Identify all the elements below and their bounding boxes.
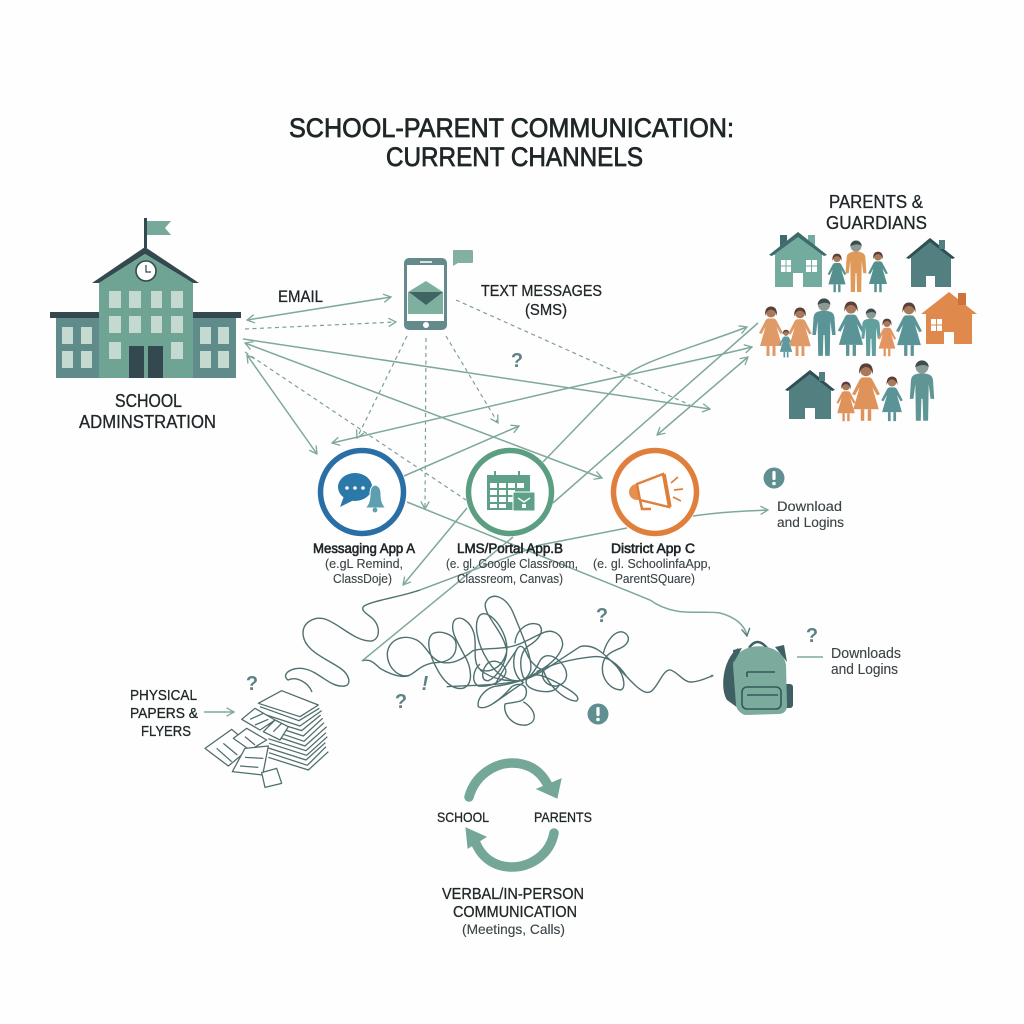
label: LMS portal app B: [446, 541, 578, 586]
label: LMS portal app B: Classreom, Canvas): [457, 572, 563, 586]
heading: parents and guardians: GUARDIANS: [826, 213, 927, 233]
icon: paper stack: [205, 691, 328, 787]
heading: parents and guardians: [826, 192, 927, 233]
app circle: LMS portal: [468, 450, 552, 534]
label: text messages: (SMS): [525, 302, 567, 319]
label: district app C: (e. gl. SchoolinfaApp,: [593, 557, 711, 571]
icon: school building: [50, 218, 241, 378]
label: downloads and logins: and Logins: [831, 662, 898, 678]
label: download and logins: [777, 499, 844, 530]
label: text messages: TEXT MESSAGES: [481, 283, 602, 300]
label: district app C: ParentSQuare): [615, 572, 695, 586]
label: messaging app A: Messaging App A: [313, 541, 415, 556]
cycle arrows: [466, 763, 561, 867]
question marks and alerts: ?: [246, 673, 258, 695]
label: download and logins: Download: [777, 499, 842, 514]
connecting arrows: [204, 297, 768, 712]
label: LMS portal app B: (e. gl. Google Classroom,: [446, 557, 578, 571]
icon: backpack: [723, 642, 793, 715]
label: messaging app A: (e.gL Remind,: [325, 557, 403, 571]
label: school and parents: [437, 809, 592, 825]
title: CURRENT CHANNELS: [386, 142, 643, 172]
icon: alert: [764, 468, 784, 488]
app circle: messaging: [320, 450, 404, 534]
label: physical papers: [130, 687, 198, 740]
label: verbal communication: COMMUNICATION: [453, 904, 577, 921]
label: school and parents: SCHOOL: [437, 809, 489, 825]
label: downloads and logins: Downloads: [831, 646, 901, 662]
heading: school administration: SCHOOL: [115, 391, 182, 411]
label: physical papers: FLYERS: [141, 723, 191, 740]
icon: families: [759, 240, 934, 421]
label: downloads and logins: [831, 646, 901, 678]
label: download and logins: and Logins: [777, 515, 844, 530]
label: verbal communication: (Meetings, Calls): [462, 921, 565, 937]
question marks and alerts: ?: [395, 691, 407, 713]
label: messaging app A: [313, 541, 415, 586]
title: [289, 113, 734, 172]
title: SCHOOL-PARENT COMMUNICATION:: [289, 113, 734, 143]
question marks and alerts: !: [422, 673, 429, 695]
question marks and alerts: [246, 605, 818, 724]
label: district app C: District App C: [611, 541, 695, 556]
icon: phone with envelope: [404, 250, 473, 330]
label: verbal communication: [442, 886, 584, 937]
label: verbal communication: VERBAL/IN-PERSON: [442, 886, 584, 903]
label: email: EMAIL: [278, 287, 323, 306]
icon: clock: [136, 261, 156, 281]
label: messaging app A: ClassDoje): [333, 572, 392, 586]
label: LMS portal app B: LMS/Portal App.B: [457, 541, 563, 556]
left squiggle to papers: [286, 590, 420, 692]
callout line: [797, 656, 823, 658]
heading: school administration: ADMINSTRATION: [79, 412, 216, 432]
label: physical papers: PHYSICAL: [130, 687, 197, 704]
heading: parents and guardians: PARENTS &: [829, 192, 923, 212]
label: district app C: [593, 541, 711, 586]
label: physical papers: PAPERS &: [130, 705, 198, 722]
label: text messages: [481, 283, 602, 319]
icon: houses: [769, 232, 977, 419]
question marks and alerts: ?: [596, 605, 608, 627]
label: school and parents: PARENTS: [534, 809, 592, 825]
question marks and alerts: ?: [806, 625, 818, 647]
tangle of communication lines: [362, 596, 713, 725]
question mark: ?: [511, 350, 523, 372]
heading: school administration: [79, 391, 216, 432]
app circle: district: [614, 450, 696, 534]
